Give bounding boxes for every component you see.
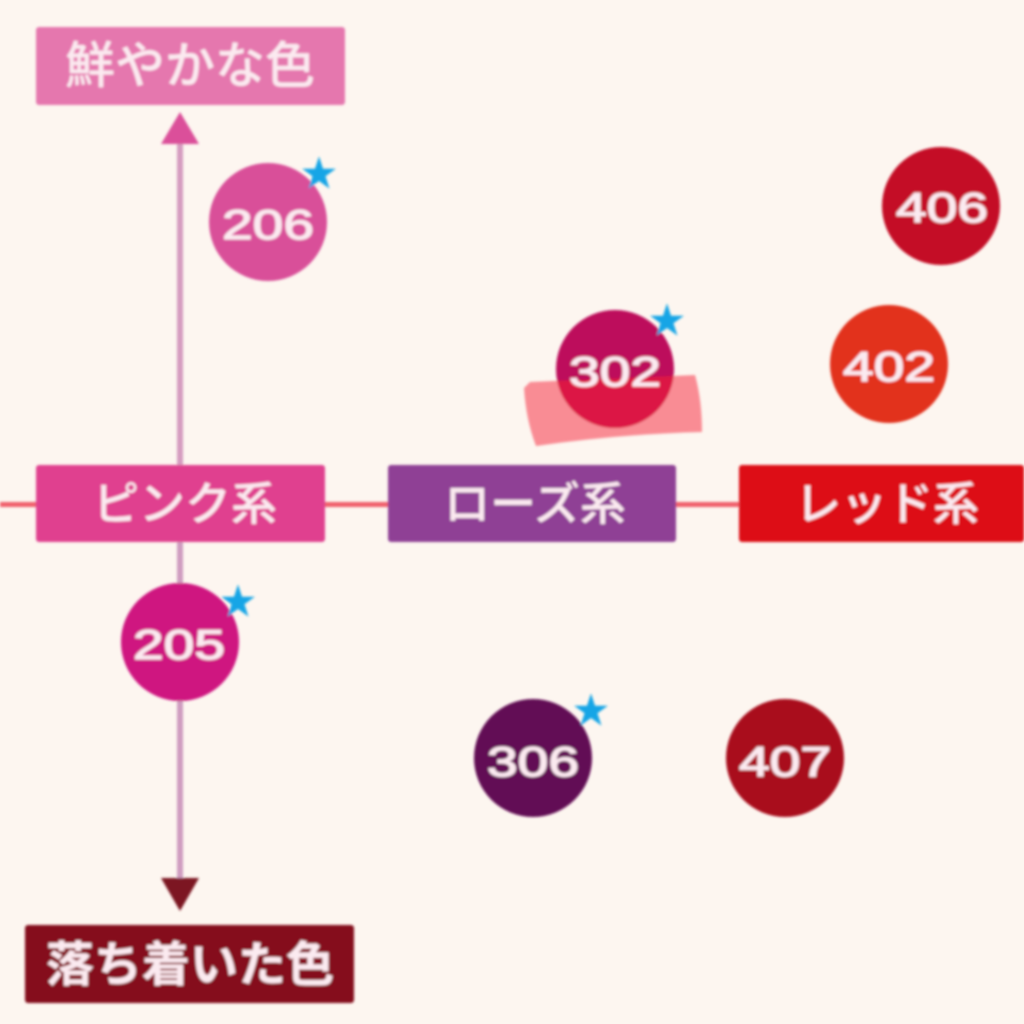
colour 302 (556, 300, 685, 428)
label: vivid colours: 鮮やかな色 (65, 38, 315, 94)
colour 407 (726, 699, 844, 817)
colour 402: 402 (843, 343, 935, 390)
label: subdued colours: 落ち着いた色 (46, 939, 334, 992)
colour 205: ★ (220, 581, 256, 622)
category: pink (36, 465, 325, 542)
colour 402 (830, 305, 948, 423)
label: subdued colours (25, 925, 354, 1003)
vertical axis: upper arrow (161, 112, 199, 466)
category: red: レッド系 (795, 478, 979, 530)
label: vivid colours (36, 27, 345, 105)
category: red (739, 465, 1024, 542)
colour 206: 206 (222, 201, 314, 248)
colour 302: 302 (569, 348, 661, 395)
colour 406 (882, 147, 1000, 265)
category: rose: ローズ系 (444, 478, 626, 530)
colour 306: 306 (487, 738, 579, 785)
colour 205 (121, 581, 256, 701)
colour 406: 406 (896, 184, 988, 231)
colour 407: 407 (739, 738, 831, 785)
vertical axis: lower arrow (161, 542, 199, 911)
colour 306 (474, 690, 609, 817)
category: pink: ピンク系 (93, 478, 277, 530)
colour 306: ★ (573, 690, 609, 731)
category: rose (388, 465, 676, 542)
horizontal axis line (0, 502, 1024, 507)
swatch stroke behind 302 (524, 375, 702, 446)
colour 205: 205 (133, 621, 225, 668)
colour 206 (209, 153, 337, 281)
colour 206: ★ (301, 153, 337, 194)
colour 302: ★ (649, 300, 685, 341)
